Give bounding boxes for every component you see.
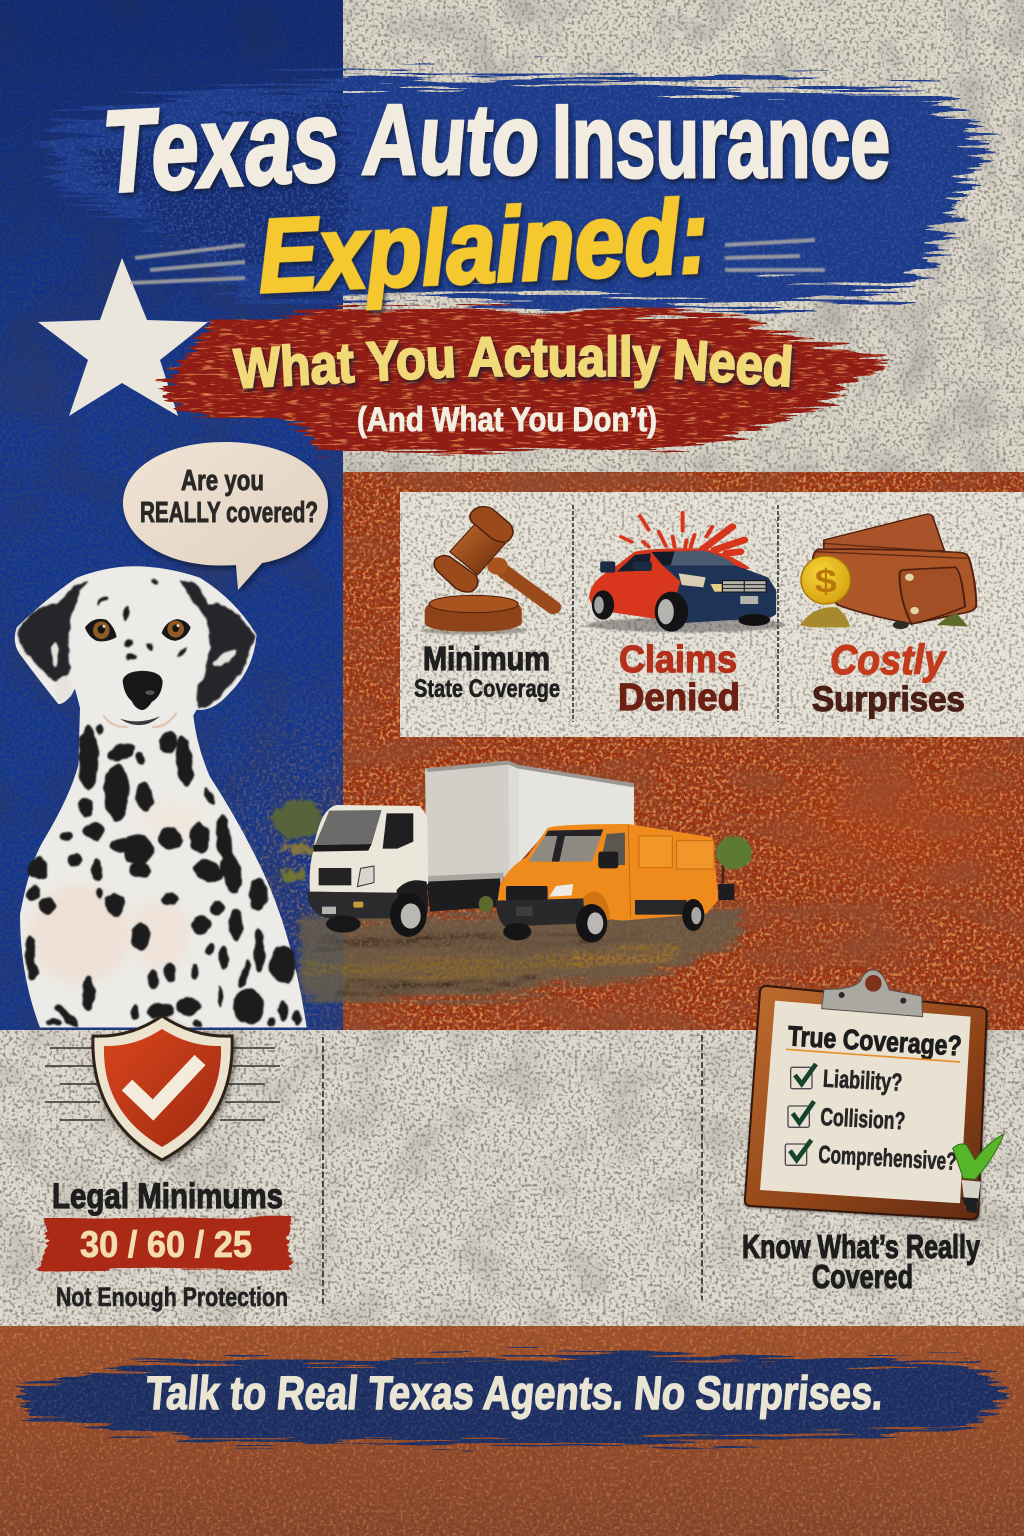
- vehicles: white box truck and orange van: [307, 761, 752, 943]
- icon: damaged car: [587, 513, 786, 632]
- label: costly surprises: [812, 636, 965, 719]
- dog eyes: [85, 619, 191, 641]
- icon: shield with check: [45, 1016, 280, 1160]
- clipboard checklist: Comprehensive?: [818, 1142, 957, 1176]
- label: know what's really covered: Covered: [812, 1258, 913, 1295]
- subtitle: What You Actually Need: What You: [232, 325, 457, 400]
- label: claims denied: Denied: [618, 677, 740, 719]
- orange cargo van: [496, 824, 752, 943]
- paper: [760, 1001, 971, 1203]
- scene: ground and shrubs under vehicles: [273, 800, 745, 1000]
- dog spots: [17, 580, 301, 1031]
- label: minimum state coverage: [414, 640, 560, 703]
- checklist heading: True Coverage?: [787, 1020, 962, 1062]
- star of Texas: [38, 258, 208, 416]
- label: minimum state coverage: State Coverage: [414, 675, 560, 703]
- blue brush stroke behind title: [50, 78, 990, 305]
- dog white ear highlights: [51, 642, 239, 701]
- subtitle: What You Actually Need: Actually: [468, 325, 660, 388]
- decorative speed streaks beside Explained: [130, 240, 825, 283]
- clipboard checklist: Collision?: [820, 1104, 906, 1135]
- speech bubble: [123, 442, 328, 590]
- title: Explained: Explained:: [256, 179, 711, 315]
- icon: wallet and coin: $: [815, 563, 837, 600]
- background: bottom rust band: [0, 1326, 1024, 1536]
- title: Texas Auto Insurance: Texas: [100, 75, 342, 217]
- clipboard checklist: Liability?: [822, 1066, 903, 1097]
- metal clip: [822, 970, 923, 1017]
- background: lower parchment band: [0, 1030, 1024, 1326]
- red brush stroke behind subtitle: [162, 308, 890, 452]
- background: Texas flag white field: [343, 0, 1024, 472]
- checklist items: [785, 1067, 812, 1165]
- clipboard board: [745, 986, 987, 1219]
- title: Texas Auto Insurance: [100, 75, 890, 217]
- speech bubble: REALLY covered?: [140, 497, 318, 529]
- subtitle: What You Actually Need: Need: [671, 327, 795, 398]
- label: costly surprises: Surprises: [812, 680, 965, 719]
- banner: 30 / 60 / 25: 30 / 60 / 25: [80, 1224, 252, 1265]
- subtitle: What You Actually Need: [232, 325, 795, 400]
- label: claims denied: Claims: [619, 639, 737, 681]
- icon: wallet and coin: [800, 514, 976, 629]
- label: claims denied: [618, 639, 740, 719]
- dog muzzle and nose: [104, 671, 176, 727]
- paintbrush with green check: [953, 1134, 1004, 1213]
- title: Texas Auto Insurance: Auto: [359, 84, 545, 196]
- icon: gavel: [420, 507, 553, 635]
- white box truck: [307, 761, 634, 937]
- panel: three risks: [400, 492, 1024, 737]
- footer brush banner: [18, 1355, 1010, 1445]
- background: Texas flag blue field: [0, 0, 343, 1030]
- subtitle: And What You Don't: (And What You Don’t): [357, 401, 657, 439]
- background: Texas flag red field: [343, 472, 1024, 1030]
- dalmatian dog: [15, 566, 307, 1031]
- section dividers in parchment band: [323, 1035, 702, 1305]
- label: minimum state coverage: Minimum: [423, 640, 550, 677]
- label: know what's really covered: [742, 1228, 980, 1295]
- label: not enough protection: Not Enough Protection: [56, 1282, 288, 1312]
- label: legal minimums: Legal Minimums: [52, 1177, 283, 1216]
- label: costly surprises: Costly: [830, 636, 947, 683]
- speech bubble: Are you: [181, 465, 264, 497]
- clipboard checklist: [745, 970, 1004, 1219]
- banner: 30 / 60 / 25: [40, 1216, 293, 1271]
